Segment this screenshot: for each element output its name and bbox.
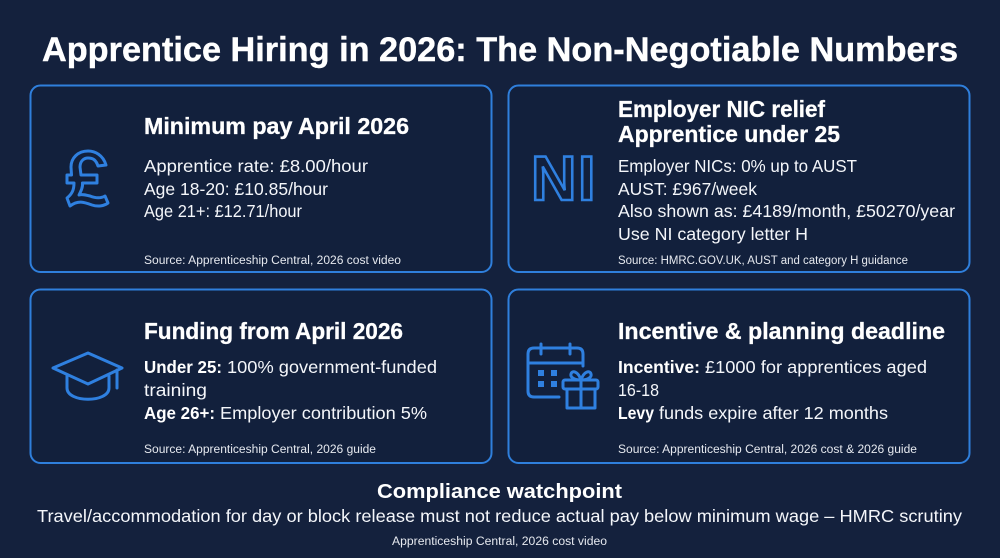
panel: incentive and deadline: [508, 290, 970, 463]
compliance source: Apprenticeship Central, 2026 cost video: [392, 536, 607, 548]
icon: NI letters: N: [531, 144, 576, 214]
heading: minimum pay: Minimum pay April 2026: [144, 113, 409, 139]
NIC details: Use NI category letter H: [618, 224, 808, 244]
NIC details: [618, 156, 955, 244]
compliance statement: Travel/accommodation for day or block release must not reduce actual pay below minimum wage – HMRC scrutiny: [37, 506, 962, 526]
pay rates: Age 18-20: £10.85/hour: [144, 179, 328, 199]
panel: employer NIC relief: [508, 86, 970, 272]
heading: incentive: Incentive & planning deadline: [618, 318, 945, 344]
icon: NI letters: I: [578, 144, 596, 214]
icon: graduation cap: [53, 353, 122, 399]
incentive details: £1000 for apprentices aged: [705, 357, 927, 377]
funding details: training: [144, 380, 207, 400]
pay rates: Apprentice rate: £8.00/hour: [144, 156, 368, 176]
heading: employer NIC relief: Apprentice under 25: [618, 121, 840, 147]
panel: minimum pay: [30, 86, 492, 272]
NIC details: Also shown as: £4189/month, £50270/year: [618, 201, 955, 221]
source: minimum pay: Source: Apprenticeship Central, 2026 cost video: [144, 255, 401, 267]
heading: funding: Funding from April 2026: [144, 318, 403, 344]
source: funding: Source: Apprenticeship Central, 2026 guide: [144, 444, 376, 456]
incentive details: Levy: [618, 403, 654, 423]
NIC details: AUST: £967/week: [618, 179, 757, 199]
incentive details: 16-18: [618, 380, 659, 400]
panel: funding: [30, 290, 492, 463]
funding details: Age 26+:: [144, 403, 215, 423]
icon: pound sign: [67, 151, 108, 206]
incentive details: Incentive:: [618, 357, 700, 377]
compliance watchpoint: [37, 481, 962, 548]
funding details: Employer contribution 5%: [220, 403, 427, 423]
pay rates: [144, 156, 368, 221]
funding details: Under 25:: [144, 357, 222, 377]
heading: employer NIC relief: Employer NIC relief: [618, 96, 825, 122]
compliance heading: Compliance watchpoint: [377, 481, 622, 503]
funding details: 100% government-funded: [227, 357, 437, 377]
funding details: [144, 357, 437, 423]
incentive details: [618, 357, 927, 423]
NIC details: Employer NICs: 0% up to AUST: [618, 156, 857, 176]
title: Apprentice Hiring in 2026: The Non-Negotiable Numbers: [42, 31, 958, 69]
incentive details: funds expire after 12 months: [659, 403, 888, 423]
heading: employer NIC relief: [618, 96, 840, 147]
pay rates: Age 21+: £12.71/hour: [144, 201, 302, 221]
icon: calendar and gift: [528, 344, 598, 408]
source: NIC relief: Source: HMRC.GOV.UK, AUST and category H guidance: [618, 255, 908, 267]
source: incentive: Source: Apprenticeship Central, 2026 cost & 2026 guide: [618, 444, 917, 456]
